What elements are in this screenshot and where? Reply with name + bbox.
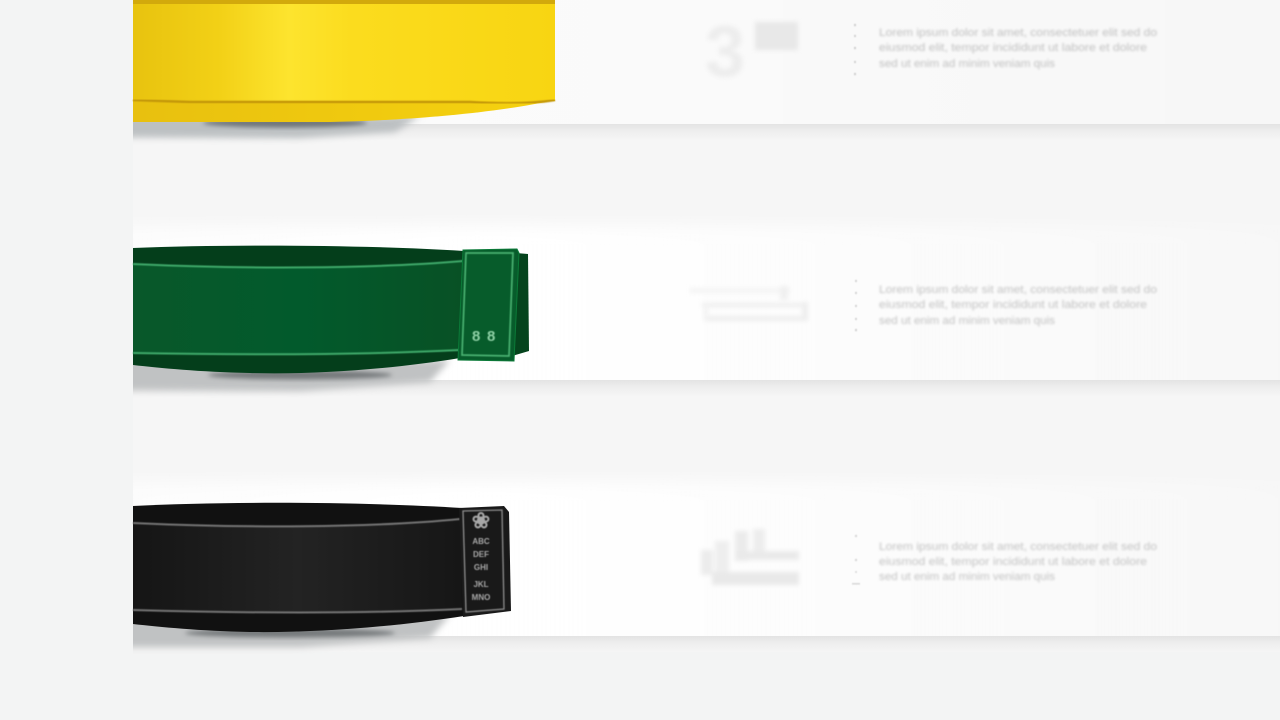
black band shadow — [110, 615, 450, 647]
yellow band shadow — [110, 116, 420, 138]
green tab — [458, 249, 519, 361]
icon: faint outlined shape row 2 — [690, 286, 808, 321]
icon: bar chart row 3 — [701, 529, 799, 585]
black tab label: GHI — [474, 563, 488, 572]
black tab label: ❀ — [472, 508, 490, 533]
green tab border — [462, 253, 513, 356]
text block row 1: sed ut enim ad minim veniam quis — [879, 58, 1056, 70]
black band outer shape — [133, 503, 464, 632]
panel: row 2 strip — [133, 227, 1280, 386]
green band outer shape — [133, 246, 464, 373]
icon: number three with blocks — [705, 12, 798, 92]
text block row 3: Lorem ipsum dolor sit amet, consectetuer elit sed do — [879, 541, 1157, 553]
text block row 3: sed ut enim ad minim veniam quis — [879, 571, 1056, 583]
text block row 1: Lorem ipsum dolor sit amet, consectetuer elit sed do — [879, 27, 1157, 39]
band lower rim — [133, 98, 555, 122]
band main face — [133, 4, 555, 101]
band lower shadow line — [133, 100, 555, 103]
black tab label: MNO — [472, 593, 490, 602]
panel: row 1 strip — [133, 0, 1280, 140]
green band back end — [512, 253, 529, 356]
green band shadow — [110, 360, 450, 391]
green band stitch lines — [133, 261, 463, 354]
black ribbon band — [133, 503, 511, 632]
black tab label: ABC — [472, 537, 490, 546]
band top rim — [133, 0, 555, 4]
green tab label: 8 — [487, 328, 495, 345]
text block row 3 — [879, 541, 1157, 583]
green ribbon band — [133, 246, 529, 373]
divider dots row 2 — [855, 280, 857, 331]
black tab border — [463, 510, 504, 612]
black tab label — [472, 508, 490, 602]
text block row 2 — [879, 284, 1157, 327]
black tab label: JKL — [473, 580, 489, 589]
text block row 3: eiusmod elit, tempor incididunt ut labore et dolore — [879, 556, 1147, 568]
text block row 2: sed ut enim ad minim veniam quis — [879, 315, 1056, 327]
black tab — [459, 506, 511, 617]
green band main face — [133, 261, 463, 354]
divider dots row 3 — [852, 535, 860, 585]
text block row 1: eiusmod elit, tempor incididunt ut labore et dolore — [879, 42, 1147, 54]
text block row 2: eiusmod elit, tempor incididunt ut labore et dolore — [879, 299, 1147, 311]
green tab label — [472, 328, 495, 345]
text block row 2: Lorem ipsum dolor sit amet, consectetuer elit sed do — [879, 284, 1157, 296]
text block row 1 — [879, 27, 1157, 70]
black tab label: DEF — [473, 550, 489, 559]
black band stitch lines — [133, 519, 462, 612]
divider dots row 1 — [854, 24, 856, 75]
panel: row 3 strip — [133, 483, 1280, 642]
black band main face — [133, 519, 462, 612]
yellow ribbon band — [133, 0, 555, 122]
icon: number three with blocks: 3 — [705, 12, 745, 92]
green tab label: 8 — [472, 328, 480, 345]
